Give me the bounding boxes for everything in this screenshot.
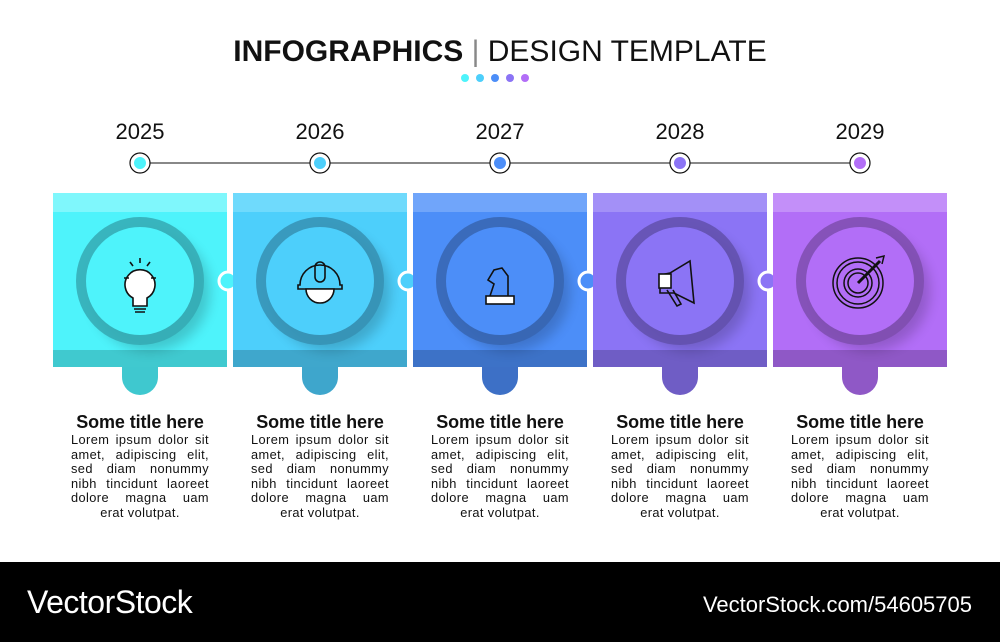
icon: target: [833, 256, 884, 308]
text: item 2: erat volutpat.: [280, 505, 360, 520]
text: item 4: dolore magna uam: [611, 490, 749, 505]
text: item 5: sed diam nonummy: [791, 461, 929, 476]
icon: bulb: [124, 258, 156, 312]
icon: megaphone: [659, 261, 694, 306]
timeline: 2029: [836, 119, 884, 144]
text: item 1: [71, 412, 209, 520]
text: item 3: dolore magna uam: [431, 490, 569, 505]
text: item 4: [611, 412, 749, 520]
text: item 5: Lorem ipsum dolor sit: [791, 432, 929, 447]
icon: chess knight: [486, 268, 514, 304]
text: item 5: dolore magna uam: [791, 490, 929, 505]
footer bar: [0, 562, 1000, 642]
timeline: [116, 119, 884, 174]
text: item 3: Some title here: [436, 412, 564, 432]
timeline: 2025: [116, 119, 164, 144]
text: item 3: erat volutpat.: [460, 505, 540, 520]
text: item 1: Lorem ipsum dolor sit: [71, 432, 209, 447]
text: item 5: amet, adipiscing elit,: [791, 447, 929, 462]
connector 4: [759, 272, 777, 290]
text: item 2: dolore magna uam: [251, 490, 389, 505]
panel 3: [413, 193, 587, 395]
text: item 2: [251, 412, 389, 520]
text: item 4: Lorem ipsum dolor sit: [611, 432, 749, 447]
text: item 4: Some title here: [616, 412, 744, 432]
text: item 2: sed diam nonummy: [251, 461, 389, 476]
timeline: 2026: [296, 119, 344, 144]
connector 1: [219, 272, 237, 290]
panel 4: [593, 193, 767, 395]
panel 5: [773, 193, 947, 395]
panel 2: [233, 193, 407, 395]
text: item 3: nibh tincidunt laoreet: [431, 476, 569, 491]
text: item 1: dolore magna uam: [71, 490, 209, 505]
connector 3: [579, 272, 597, 290]
text: item 3: [431, 412, 569, 520]
text: item 2: Lorem ipsum dolor sit: [251, 432, 389, 447]
text: item 2: Some title here: [256, 412, 384, 432]
text: item 5: Some title here: [796, 412, 924, 432]
icon: helmet gear: [298, 262, 342, 303]
text: item 5: erat volutpat.: [820, 505, 900, 520]
text: item 4: amet, adipiscing elit,: [611, 447, 749, 462]
footer brand: VectorStock: [27, 584, 192, 620]
text: item 1: amet, adipiscing elit,: [71, 447, 209, 462]
text: item 1: sed diam nonummy: [71, 461, 209, 476]
timeline: 2027: [476, 119, 524, 144]
text: item 2: amet, adipiscing elit,: [251, 447, 389, 462]
connector 2: [399, 272, 417, 290]
text: item 1: erat volutpat.: [100, 505, 180, 520]
text: item 3: sed diam nonummy: [431, 461, 569, 476]
timeline: 2028: [656, 119, 704, 144]
panel 1: [53, 193, 227, 395]
text: item 3: amet, adipiscing elit,: [431, 447, 569, 462]
footer id: VectorStock.com/54605705: [703, 592, 972, 617]
title dots: [461, 74, 529, 82]
puzzle panels: [53, 193, 947, 395]
title: INFOGRAPHICS | DESIGN TEMPLATE: [233, 35, 767, 68]
text: item 5: [791, 412, 929, 520]
text: item 4: erat volutpat.: [640, 505, 720, 520]
text: item 1: nibh tincidunt laoreet: [71, 476, 209, 491]
text: item 4: sed diam nonummy: [611, 461, 749, 476]
text: item 3: Lorem ipsum dolor sit: [431, 432, 569, 447]
text: item 5: nibh tincidunt laoreet: [791, 476, 929, 491]
text: item 1: Some title here: [76, 412, 204, 432]
text: item 4: nibh tincidunt laoreet: [611, 476, 749, 491]
text: item 2: nibh tincidunt laoreet: [251, 476, 389, 491]
